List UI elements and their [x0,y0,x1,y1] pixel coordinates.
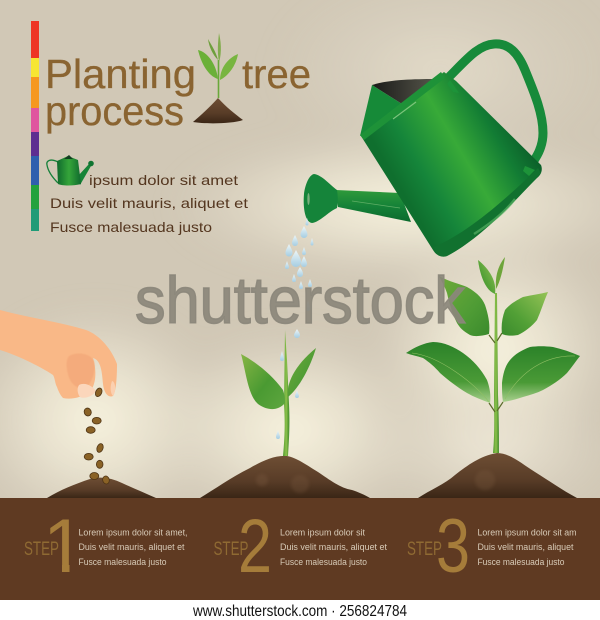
can opening [372,79,441,104]
step 2 label: Fusce malesuada justo [280,557,367,567]
title: Planting [45,51,196,97]
watermark: shutterstock [135,263,466,337]
upper left leaf [439,276,489,336]
intro text: Duis velit mauris, aliquet et [50,195,248,211]
soil mound 2 [200,456,370,498]
title: process [45,88,184,134]
step 2 label [214,504,387,589]
right leaf [288,348,316,397]
step 3 label: Fusce malesuada justo [478,557,564,567]
numeral 1: 1 [43,504,85,589]
soil mound 1 [47,478,156,498]
seeds [83,387,110,485]
numeral 1 [50,520,70,572]
step 1 label: Lorem ipsum dolor sit amet, [78,528,188,538]
step 1: hand and seeds [0,310,156,498]
water drops [276,218,314,439]
step 3 label: STEP [407,538,442,560]
soil mound 3 [418,453,577,498]
can rim [360,72,445,140]
upper right leaf [502,292,548,336]
lower right leaf [502,346,580,402]
step 1 label: Duis velit mauris, aliquet et [78,542,185,552]
can handle [449,44,543,168]
icon: hand [0,310,117,399]
footer credit: www.shutterstock.com · 256824784 [192,603,407,620]
step 1 label [24,520,187,572]
step 3 label [407,504,576,589]
step 2 label: STEP [214,538,248,560]
intro text: Fusce malesuada justo [50,219,212,235]
intro text: ipsum dolor sit amet [89,172,238,188]
step 2 label: Duis velit mauris, aliquet et [280,542,387,552]
main stem [493,293,499,453]
step 3: grown plant [406,257,580,498]
can body [361,72,542,257]
title: tree [242,51,311,97]
left leaf [241,354,285,409]
step 1 label: STEP [24,538,59,560]
icon: title sprout [193,33,243,123]
step 1 label: Fusce malesuada justo [78,557,166,567]
brown ground panel [0,498,600,600]
step 3 label: 3 [436,504,470,589]
plant stem [283,330,289,456]
intro text [50,172,248,235]
leaf stalks [489,333,503,412]
spout pipe [336,190,411,222]
step 2 label: 2 [238,504,272,589]
spout head [304,174,338,223]
lower left leaf [406,342,490,403]
rainbow colour bar [31,21,39,231]
step 3 label: Duis velit mauris, aliquet [478,542,574,552]
step 2 label: Lorem ipsum dolor sit [280,528,365,538]
icon: small watering can [47,155,94,186]
step 3 label: Lorem ipsum dolor sit am [478,528,576,538]
icon: large watering can [304,44,543,257]
top bud leaves [478,260,495,294]
step 2: young plant [200,330,370,498]
title [45,51,311,134]
